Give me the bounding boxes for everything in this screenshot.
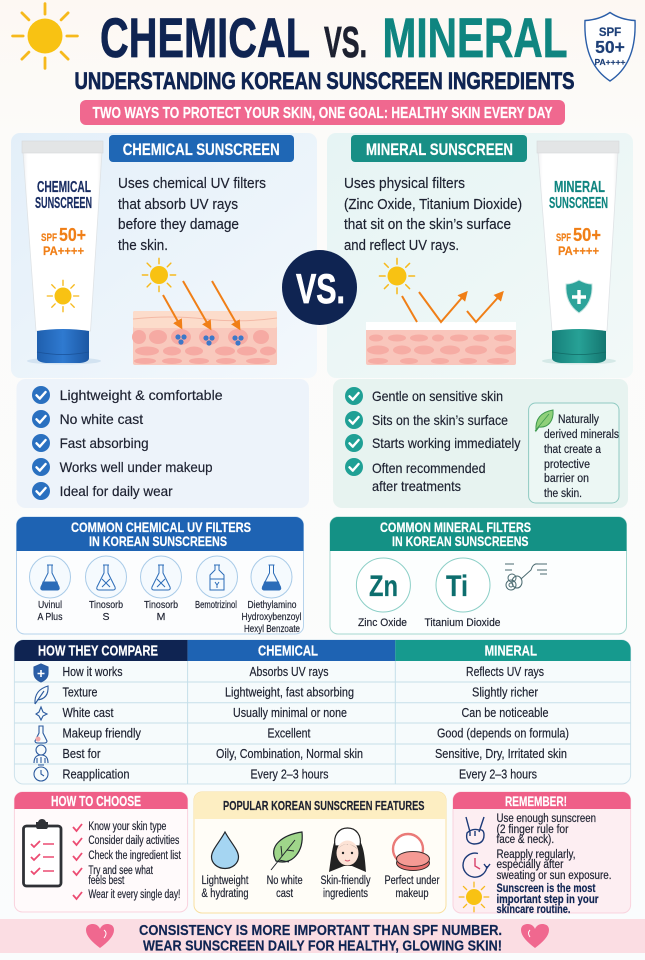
titanium dioxide: Ti (446, 570, 468, 603)
icon: sun (459, 882, 489, 912)
reminder text: Reapply regularly, (496, 849, 576, 861)
table row labels: Best for (62, 747, 100, 761)
filter names (38, 599, 302, 635)
panel: how to choose (14, 792, 188, 912)
table row labels: How it works (62, 665, 122, 679)
feature labels: makeup (396, 888, 428, 900)
mineral column: Reflects UV rays (466, 665, 544, 679)
table row icons (34, 664, 48, 781)
chemical column: Oily, Combination, Normal skin (216, 747, 363, 761)
chemical description (118, 176, 266, 254)
filter names: Diethylamino (248, 599, 297, 611)
icon: leaf (271, 832, 302, 870)
icon: spf shield: SPF (599, 27, 621, 39)
mineral tube: SUNSCREEN (549, 195, 608, 212)
chemical tube (22, 141, 103, 364)
mineral description: and reflect UV rays. (344, 238, 459, 254)
table row labels (62, 665, 142, 782)
callout: naturally derived: protective (544, 459, 590, 471)
footer message (139, 923, 502, 955)
diagram: rays reflected from skin (366, 258, 516, 365)
icon: left heart (86, 924, 114, 948)
callout: naturally derived: that create a (544, 444, 602, 456)
filter icons (30, 556, 292, 598)
checklist: feels best (88, 875, 125, 887)
icon: spf shield (585, 12, 635, 81)
icon: right heart (521, 924, 549, 948)
callout: naturally derived: derived minerals (544, 429, 619, 441)
mineral tube: 50+ (573, 224, 601, 245)
panel: mineral benefits (333, 379, 628, 508)
checklist: Try and see what (88, 865, 154, 877)
chemical column: Absorbs UV rays (250, 665, 328, 679)
reminder text: skincare routine. (496, 904, 570, 916)
mineral heading: MINERAL SUNSCREEN (366, 140, 513, 159)
icon: skincare girl (329, 828, 366, 872)
chemical column: Excellent (268, 726, 311, 740)
header (13, 4, 635, 125)
mineral filters heading: COMMON MINERAL FILTERS (380, 520, 531, 535)
filter names: Uvinul (38, 599, 62, 611)
table row labels: White cast (62, 706, 114, 720)
filter names: Tinosorb (89, 599, 123, 611)
checklist: Wear it every single day! (88, 889, 180, 901)
chemical column: Usually minimal or none (233, 706, 347, 720)
chemical column (216, 665, 363, 782)
footer banner (0, 919, 645, 955)
filter names: Tinosorb (144, 599, 178, 611)
icon: spf shield: 50+ (595, 37, 625, 57)
mineral tube: SPF (556, 232, 571, 244)
icon: two fingers (466, 817, 484, 844)
chemical benefits list: Fast absorbing (60, 435, 149, 451)
mineral benefits list: Gentle on sensitive skin (372, 388, 503, 404)
table row labels: Texture (62, 686, 98, 700)
how to choose heading: HOW TO CHOOSE (51, 794, 141, 810)
table row labels: Makeup friendly (62, 726, 142, 740)
panel: remember (453, 792, 631, 916)
chemical heading: CHEMICAL SUNSCREEN (123, 140, 280, 159)
mineral column (435, 665, 569, 782)
remember heading: REMEMBER! (505, 793, 567, 809)
mineral description: (Zinc Oxide, Titanium Dioxide) (344, 197, 522, 213)
mineral description: Uses physical filters (344, 176, 465, 192)
callout: naturally derived: Naturally (558, 414, 599, 426)
mineral heading (351, 135, 527, 162)
table header: CHEMICAL (258, 644, 318, 660)
table row labels: Reapplication (62, 768, 130, 782)
callout: naturally derived: barrier on (544, 473, 589, 485)
comparison table (14, 640, 631, 784)
reminder text: especially after (496, 859, 564, 871)
chemical filters heading: IN KOREAN SUNSCREENS (89, 534, 227, 549)
title: vs: VS. (324, 18, 367, 67)
chemical description: Uses chemical UV filters (118, 176, 266, 192)
checklist: Know your skin type (88, 821, 166, 833)
chemical benefits list: No white cast (60, 411, 143, 427)
footer message: CONSISTENCY IS MORE IMPORTANT THAN SPF NUMBER. (139, 923, 502, 939)
mineral column: Can be noticeable (462, 706, 549, 720)
diagram: rays absorbed by skin (132, 258, 277, 365)
zinc oxide: Zn (369, 570, 398, 603)
chemical column: Lightweight, fast absorbing (225, 686, 354, 700)
title: mineral: MINERAL (382, 6, 568, 69)
table header (14, 640, 631, 661)
panel: popular features (194, 792, 446, 913)
reminder text: (2 finger rule for (496, 824, 569, 836)
checklist (73, 821, 182, 901)
mineral tube (537, 141, 619, 364)
reminder text (496, 813, 612, 916)
mineral column: Slightly richer (472, 686, 538, 700)
table header: MINERAL (485, 644, 537, 660)
icon: molecule doodle (505, 564, 547, 590)
filter names: A Plus (38, 611, 62, 623)
reminder text: Use enough sunscreen (496, 813, 596, 825)
filter names: Hexyl Benzoate (244, 623, 300, 635)
feature labels: Skin-friendly (320, 875, 371, 887)
feature labels: Lightweight (202, 875, 249, 887)
reminder text: Sunscreen is the most (496, 883, 596, 895)
icon: clock (463, 853, 490, 877)
feature labels: No white (267, 875, 303, 887)
mineral benefits list: Starts working immediately (372, 435, 520, 451)
mineral benefits list: after treatments (372, 478, 461, 494)
reminder text: face & neck). (496, 834, 554, 846)
mineral tube: PA++++ (558, 244, 599, 258)
chemical benefits list (60, 387, 223, 499)
mineral filters heading: IN KOREAN SUNSCREENS (392, 534, 528, 549)
chemical description: that absorb UV rays (118, 197, 238, 213)
mineral benefits list: Often recommended (372, 460, 486, 476)
chemical filters heading (71, 520, 251, 549)
vs badge: VS. (296, 265, 345, 312)
callout: naturally derived (529, 403, 619, 503)
mineral benefits list: Sits on the skin’s surface (372, 412, 508, 428)
table header: HOW THEY COMPARE (38, 644, 158, 660)
feature labels: ingredients (323, 888, 368, 900)
mineral description (344, 176, 522, 254)
mineral description: that sit on the skin’s surface (344, 217, 511, 233)
reminder text: sweating or sun exposure. (496, 870, 612, 882)
panel: mineral sunscreen (327, 133, 633, 378)
feature labels: cast (276, 888, 294, 900)
icon: sun (13, 4, 77, 68)
chemical filters heading: COMMON CHEMICAL UV FILTERS (71, 520, 251, 535)
callout: naturally derived: the skin. (544, 488, 582, 500)
chemical heading (109, 135, 294, 162)
panel: mineral filters (330, 517, 626, 634)
chemical tube: PA++++ (43, 244, 84, 258)
chemical benefits list: Works well under makeup (60, 459, 213, 475)
chemical tube: 50+ (59, 224, 86, 245)
feature labels (202, 875, 440, 900)
footer message: WEAR SUNSCREEN DAILY FOR HEALTHY, GLOWING SKIN! (143, 939, 502, 955)
panel: chemical filters (16, 517, 304, 635)
filter names: Hydroxybenzoyl (242, 611, 302, 623)
chemical tube: CHEMICAL (37, 179, 91, 196)
tagline banner (80, 100, 565, 125)
mineral filters heading (380, 520, 531, 549)
icon: compact (393, 834, 430, 870)
chemical description: the skin. (118, 238, 168, 254)
mineral column: Good (depends on formula) (437, 726, 569, 740)
chemical tube: SPF (41, 232, 57, 244)
titanium dioxide: Titanium Dioxide (424, 617, 500, 629)
chemical tube: SUNSCREEN (35, 195, 92, 212)
filter names: Bemotrizinol (195, 599, 237, 611)
reminder text: important step in your (496, 894, 599, 906)
chemical benefits list: Lightweight & comfortable (60, 387, 223, 403)
chemical benefits list: Ideal for daily wear (60, 483, 173, 499)
feature labels: Perfect under (384, 875, 440, 887)
title: chemical: CHEMICAL (100, 6, 310, 69)
mineral tube: MINERAL (554, 179, 605, 196)
features heading: POPULAR KOREAN SUNSCREEN FEATURES (223, 799, 424, 813)
icon: clipboard (24, 819, 61, 886)
titanium dioxide (424, 558, 500, 629)
icon: spf shield: PA++++ (594, 57, 626, 67)
filter names: M (157, 611, 165, 623)
mineral column: Every 2–3 hours (459, 768, 537, 782)
panel: chemical benefits (16, 379, 309, 508)
chemical description: before they damage (118, 217, 239, 233)
vs badge (282, 250, 357, 325)
mineral benefits list (372, 388, 520, 494)
zinc oxide: Zinc Oxide (358, 617, 407, 629)
mineral column: Sensitive, Dry, Irritated skin (435, 747, 567, 761)
checklist: Consider daily activities (88, 835, 180, 847)
icon: water drop (212, 832, 238, 868)
feature labels: & hydrating (202, 888, 248, 900)
filter names: S (102, 611, 110, 623)
chemical column: Every 2–3 hours (250, 768, 328, 782)
panel: chemical sunscreen (11, 133, 317, 378)
checklist: Check the ingredient list (88, 850, 182, 862)
zinc oxide (356, 558, 410, 629)
